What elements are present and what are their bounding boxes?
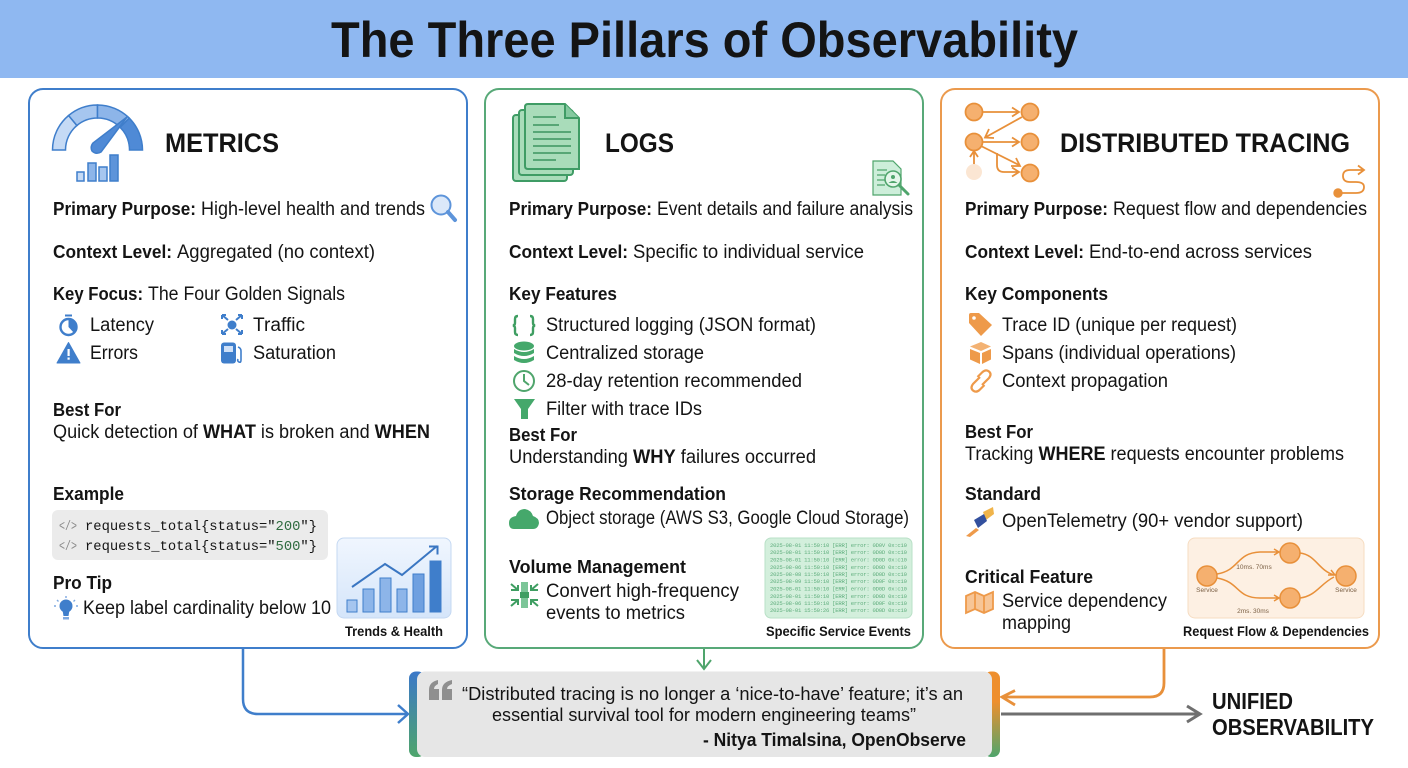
quote box: [409, 672, 1000, 757]
attribution: - Nitya Timalsina, OpenObserve: [703, 729, 966, 750]
arrow: logs to quote: [697, 649, 711, 669]
example heading: Example: [53, 483, 124, 504]
icon: stopwatch: [60, 314, 77, 335]
primary purpose: [509, 198, 913, 220]
thumbnail: log lines: 2025-08-01 11:50:10 [ERR] error: 0D0D 0x:c10: [770, 556, 908, 564]
thumbnail: trends chart: [337, 538, 451, 618]
primary purpose: [965, 198, 1367, 220]
icon: fuel pump: [221, 342, 241, 364]
icon: warning triangle: [57, 342, 80, 363]
filter: Filter with trace IDs: [546, 399, 702, 420]
code block: requests_total{status="500"}: [85, 539, 317, 555]
best for: [965, 421, 1344, 465]
thumbnail: request flow: 2ms. 30ms: [1237, 608, 1270, 615]
label: unified observability: [1212, 688, 1374, 740]
primary purpose: Primary Purpose:: [965, 198, 1108, 219]
best for: Best For: [53, 399, 121, 420]
quote text: “Distributed tracing is no longer a ‘nice-to-have’ feature; it’s an: [462, 683, 963, 704]
standard heading: Standard: [965, 483, 1041, 504]
thumbnail: log lines: 2025-08-08 11:50:10 [ERR] error: 0D0D 0x:c10: [770, 571, 908, 578]
thumbnail: log lines: 2025-08-09 11:50:10 [ERR] error: 0D0F 0x:c10: [770, 578, 908, 585]
thumbnail: log lines: 2025-08-06 11:50:10 [ERR] error: 0D0D 0x:c10: [770, 564, 908, 571]
caption: request flow & dependencies: Request Flow & Dependencies: [1183, 624, 1369, 639]
context level: Context Level:: [965, 241, 1084, 262]
primary purpose: [53, 198, 425, 220]
key focus: Key Focus:: [53, 283, 143, 304]
icon: magnifier: [432, 196, 455, 220]
icon: route: [1334, 166, 1364, 197]
icon: chain link: [972, 370, 990, 392]
critical text: Service dependency: [1002, 591, 1167, 612]
arrow: quote to unified observability: [1001, 706, 1200, 722]
context level: [965, 241, 1312, 263]
volume text: Convert high-frequency: [546, 581, 739, 602]
errors: Errors: [90, 343, 138, 364]
key focus: [53, 283, 345, 305]
thumbnail: request flow: 10ms. 70ms: [1236, 564, 1272, 571]
thumbnail: log lines: [765, 538, 912, 618]
volume management heading: Volume Management: [509, 556, 686, 577]
trace id: Trace ID (unique per request): [1002, 315, 1237, 336]
icon: database: [514, 342, 534, 363]
best for: Understanding WHY failures occurred: [509, 447, 816, 468]
context level: [53, 241, 375, 263]
label: unified observability: OBSERVABILITY: [1212, 714, 1374, 740]
heading: distributed tracing: DISTRIBUTED TRACING: [1060, 128, 1350, 158]
thumbnail: log lines: 2025-08-01 15:50:26 [ERR] error: 0D0D 0x:c10: [770, 607, 908, 614]
centralized storage: Centralized storage: [546, 343, 704, 364]
icon: trace graph: [966, 104, 1038, 182]
context level: Context Level:: [509, 241, 628, 262]
icon: gauge: [52, 105, 142, 181]
best for: Best For: [965, 421, 1033, 442]
best for: Quick detection of WHAT is broken and WHEN: [53, 422, 430, 443]
context level: Aggregated (no context): [177, 242, 375, 263]
context level: End-to-end across services: [1089, 242, 1312, 263]
quote text: essential survival tool for modern engineering teams”: [492, 704, 916, 725]
best for: Best For: [509, 424, 577, 445]
volume text: [546, 581, 739, 624]
thumbnail: log lines: 2025-08-01 11:50:10 [ERR] error: 0D0D 0x:c10: [770, 549, 908, 556]
primary purpose: High-level health and trends: [201, 199, 425, 220]
label: unified observability: UNIFIED: [1212, 688, 1293, 714]
thumbnail: request flow: [1188, 538, 1364, 618]
icon: clock: [514, 371, 534, 391]
icon: id tag: [969, 313, 992, 336]
critical feature heading: Critical Feature: [965, 566, 1093, 587]
icon: telescope: [966, 507, 994, 537]
opentelemetry: OpenTelemetry (90+ vendor support): [1002, 511, 1303, 532]
context level: [509, 241, 864, 263]
critical text: mapping: [1002, 613, 1071, 634]
primary purpose: Request flow and dependencies: [1113, 199, 1367, 220]
code block: requests_total{status="200"}: [85, 519, 317, 535]
retention: 28-day retention recommended: [546, 371, 802, 392]
panel: metrics: [29, 89, 467, 648]
best for: [509, 424, 816, 468]
caption: trends & health: Trends & Health: [345, 624, 443, 639]
thumbnail: log lines: 2025-08-01 11:50:10 [ERR] error: 0D0D 0x:c10: [770, 586, 908, 592]
icon: map: [966, 592, 993, 613]
icon: compress: [511, 582, 538, 608]
code block: </>: [59, 519, 77, 535]
storage recommendation heading: Storage Recommendation: [509, 483, 726, 504]
icon: box: [970, 342, 991, 364]
best for: [53, 399, 430, 443]
panel: distributed tracing: [941, 89, 1379, 648]
icon: traffic: [222, 315, 242, 334]
thumbnail: log lines: 2025-08-01 11:50:10 [ERR] error: 0D0D 0x:c10: [770, 593, 908, 600]
heading: logs: LOGS: [605, 128, 674, 158]
context level: Context Level:: [53, 241, 172, 262]
panel: logs: [485, 89, 923, 648]
thumbnail: request flow: Service: [1196, 587, 1218, 594]
arrow: metrics to quote: [243, 649, 408, 723]
code block: [52, 510, 328, 560]
latency: Latency: [90, 315, 154, 336]
pro tip heading: Pro Tip: [53, 572, 112, 593]
best for: Tracking WHERE requests encounter problems: [965, 444, 1344, 465]
caption: specific service events: Specific Service Events: [766, 624, 911, 639]
context level: Specific to individual service: [633, 242, 864, 263]
pro tip text: Keep label cardinality below 10: [83, 598, 331, 619]
icon: stacked documents: [513, 104, 579, 181]
icon: document search: [873, 161, 908, 195]
key components heading: Key Components: [965, 283, 1108, 304]
traffic: Traffic: [253, 315, 305, 336]
arrow: tracing to quote: [1002, 649, 1164, 705]
thumbnail: log lines: 2025-08-06 11:50:10 [ERR] error: 0D0F 0x:c10: [770, 600, 908, 607]
title banner: [0, 0, 1408, 78]
critical text: [1002, 591, 1167, 634]
icon: funnel: [514, 399, 535, 419]
volume text: events to metrics: [546, 603, 685, 624]
thumbnail: log lines: 2025-08-01 11:50:10 [ERR] error: 0D0V 0x:c10: [770, 542, 908, 549]
icon: cloud: [509, 509, 539, 529]
key features heading: Key Features: [509, 283, 617, 304]
icon: quote mark: [429, 680, 452, 700]
thumbnail: request flow: Service: [1335, 587, 1357, 594]
icon: light bulb: [54, 596, 78, 620]
structured logging: Structured logging (JSON format): [546, 315, 816, 336]
spans: Spans (individual operations): [1002, 343, 1236, 364]
heading: metrics: METRICS: [165, 128, 279, 158]
key focus: The Four Golden Signals: [148, 284, 345, 305]
primary purpose: Event details and failure analysis: [657, 199, 913, 220]
code block: </>: [59, 539, 77, 555]
quote text: [462, 683, 963, 725]
icon: braces: [513, 316, 535, 335]
object storage: Object storage (AWS S3, Google Cloud Storage): [546, 508, 909, 529]
title banner: The Three Pillars of Observability: [331, 12, 1078, 68]
saturation: Saturation: [253, 343, 336, 364]
primary purpose: Primary Purpose:: [53, 198, 196, 219]
context propagation: Context propagation: [1002, 371, 1168, 392]
primary purpose: Primary Purpose:: [509, 198, 652, 219]
